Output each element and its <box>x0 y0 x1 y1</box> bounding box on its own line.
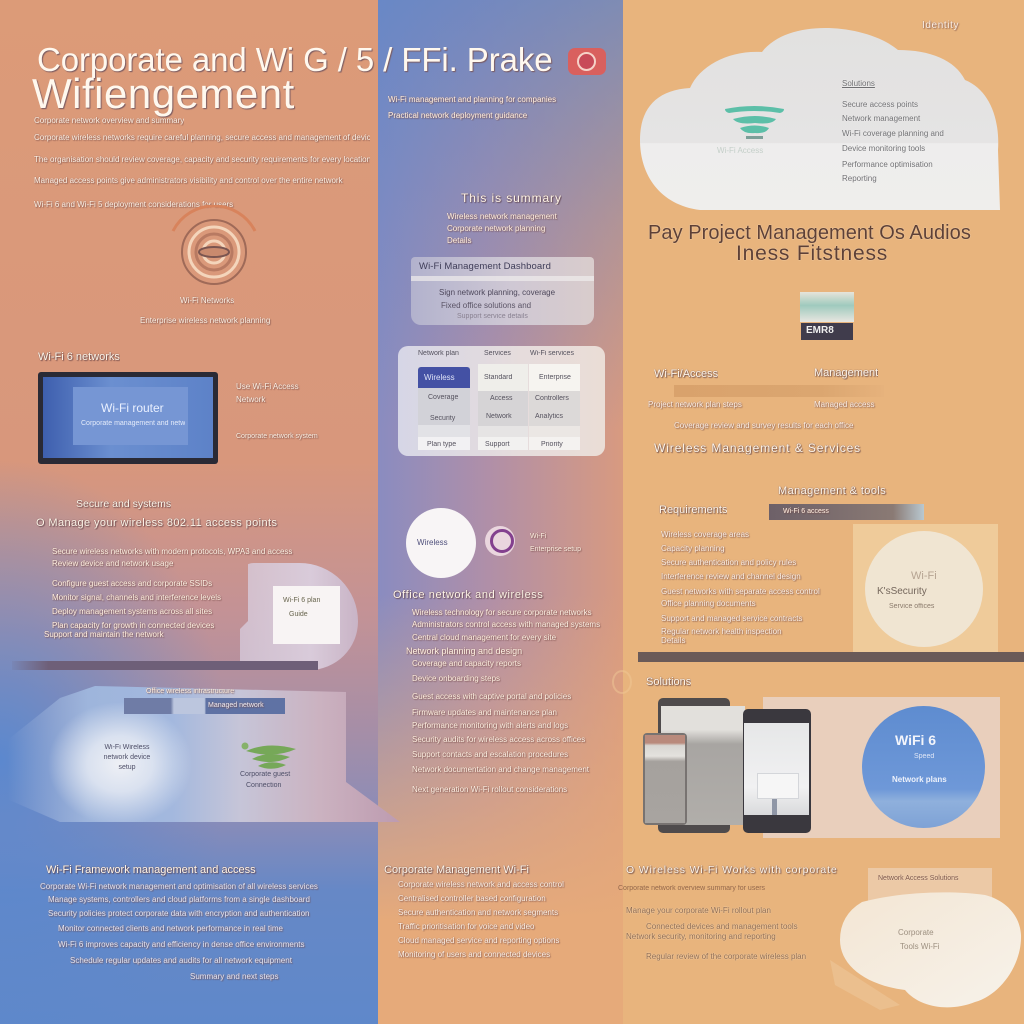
illustration: devices <box>643 698 811 833</box>
section: right list: Secure authentication and policy rules <box>661 558 796 567</box>
table column 1: Security <box>430 415 455 422</box>
text block: cloud list: Network management <box>842 114 920 123</box>
text: purple circle caption: Wi-Fi <box>530 533 546 540</box>
header strip <box>124 698 285 714</box>
text: teal wifi caption: Wi-Fi Access <box>717 146 763 155</box>
text block: bottom middle: Centralised controller based configuration <box>398 894 546 903</box>
circle: blue badge <box>862 706 985 828</box>
section: survey left: Plan capacity for growth in connected devices <box>52 621 214 630</box>
text block: bottom right: Manage your corporate Wi-Fi rollout plan <box>626 906 771 915</box>
icon: red badge <box>568 48 606 75</box>
header strip right <box>769 504 924 520</box>
text: top right tag: Identity <box>922 20 959 31</box>
text block: bottom left: Monitor connected clients and network performance in real time <box>58 924 283 933</box>
text: laptop notes <box>236 382 319 441</box>
text: laptop notes: Corporate network system <box>236 433 318 440</box>
heading: where: Wi-Fi 6 networks <box>38 351 120 363</box>
section: right columns: Managed access <box>814 400 874 409</box>
title: Wifiengement <box>32 70 295 117</box>
text block: bottom middle: Corporate wireless network and access control <box>398 880 564 889</box>
screen: Wi-Fi router <box>101 401 164 415</box>
text block: middle list: Security audits for wireless access across offices <box>412 735 585 744</box>
text block: intro middle: Wi-Fi management and planning for companies <box>388 95 556 104</box>
panel: left column <box>0 0 378 1024</box>
section: right list: Interference review and channel design <box>661 572 801 581</box>
tablet back <box>658 698 730 833</box>
circle: blue badge: Speed <box>914 753 934 760</box>
text block: bottom middle: Traffic prioritisation for voice and video <box>398 922 535 931</box>
text: bottom cloud <box>878 874 959 951</box>
text block: middle list: Guest access with captive portal and policies <box>412 692 571 701</box>
card: Guide <box>289 611 308 618</box>
text: wifi icon caption: Wi-Fi Networks <box>180 296 234 305</box>
icon: wifi rings left <box>172 205 256 285</box>
circle: blue badge: Network plans <box>892 775 947 784</box>
text block: middle list: Office network and wireless <box>393 589 544 601</box>
text block: bottom right: Regular review of the corporate wireless plan <box>646 952 806 961</box>
card: glass banner: Support service details <box>457 313 528 320</box>
text: purple circle caption <box>530 532 582 554</box>
heading: right column <box>648 222 971 265</box>
text block: middle list: Central cloud management for every site <box>412 633 556 642</box>
section: survey left: Monitor signal, channels and interference levels <box>52 593 221 602</box>
panel: office network: Connection <box>246 782 281 789</box>
panel: devices card <box>763 697 1000 838</box>
table column 2: Network <box>486 413 512 420</box>
table column 1: Plan type <box>427 441 456 448</box>
section: middle feature: Details <box>447 236 471 245</box>
text block: intro left <box>34 116 370 210</box>
cloud: bottom right <box>830 868 1021 1010</box>
text block: bottom left: Summary and next steps <box>190 972 278 981</box>
text block: middle list: Coverage and capacity reports <box>412 659 521 668</box>
heading: management: Management & tools <box>778 485 886 497</box>
icon: teal wifi <box>725 106 784 139</box>
section: middle feature <box>447 191 562 245</box>
screen <box>43 377 213 458</box>
text block: middle list: Performance monitoring with alerts and logs <box>412 721 568 730</box>
panel: middle column <box>378 0 623 1024</box>
card: comparison table: Wi-Fi services <box>530 350 574 357</box>
section: right columns: Coverage review and survey results for each office <box>674 421 854 430</box>
small tablet <box>643 733 687 825</box>
heading: right column: Pay Project Management Os Audios <box>648 222 971 244</box>
card <box>273 586 340 644</box>
laptop illustration <box>38 372 218 464</box>
text block: bottom middle: Cloud managed service and reporting options <box>398 936 559 945</box>
card: glass banner: Fixed office solutions and <box>441 301 531 310</box>
text block: bottom left: Corporate Wi-Fi network management and optimisation of all wireless services <box>40 882 318 891</box>
section: right list: Regular network health inspection <box>661 627 782 636</box>
section: right list: Requirements <box>659 504 727 516</box>
title: Corporate and Wi G / 5 / FFi. Prake <box>37 41 553 78</box>
text block: intro middle: Practical network deployment guidance <box>388 111 527 120</box>
text block: cloud list: Secure access points <box>842 100 918 109</box>
card: Wi-Fi 6 plan <box>283 597 320 604</box>
text block: intro left: Corporate network overview and summary <box>34 116 184 125</box>
header strip right: Wi-Fi 6 access <box>783 508 829 515</box>
section: right list: Capacity planning <box>661 544 725 553</box>
section: survey left <box>36 498 294 640</box>
text block: cloud list: Device monitoring tools <box>842 144 925 153</box>
text block: intro middle <box>388 95 558 121</box>
circle <box>865 531 983 647</box>
text block: cloud list: Performance optimisation <box>842 160 933 169</box>
text block: middle list: Network documentation and change management <box>412 765 589 774</box>
icon: white circle badge: Wireless <box>417 538 448 547</box>
cloud: top right <box>640 28 1000 210</box>
table column 3: Priority <box>541 441 563 448</box>
card: comparison table: Services <box>484 350 511 357</box>
text block: intro left: Corporate wireless networks require careful planning, secure access and management of devices <box>34 133 370 142</box>
section: right list <box>659 504 821 645</box>
panel: office network <box>0 686 400 822</box>
text block: bottom left: Wi-Fi 6 improves capacity and efficiency in dense office environments <box>58 940 304 949</box>
text block: bottom left: Manage systems, controllers and cloud platforms from a single dashboard <box>48 895 310 904</box>
text block: bottom left: Wi-Fi Framework management and access <box>46 864 256 876</box>
text block: bottom right: Connected devices and management tools <box>646 922 798 931</box>
table column 3 <box>529 364 580 450</box>
text block: bottom right: Corporate network overview summary for users <box>618 885 765 892</box>
text block: intro left: Managed access points give administrators visibility and control over the entire network <box>34 176 343 185</box>
text block: middle list: Support contacts and escalation procedures <box>412 750 568 759</box>
section: survey left: Secure wireless networks with modern protocols, WPA3 and access <box>52 547 292 556</box>
divider bar left <box>12 661 318 670</box>
section: right columns: Wi-Fi/Access <box>654 368 718 380</box>
panel: right column <box>623 0 1024 1024</box>
title <box>32 41 553 118</box>
icon: purple circle <box>485 526 515 556</box>
text block: middle list: Firmware updates and maintenance plan <box>412 708 557 717</box>
subheading: O Manage your wireless 802.11 access points <box>36 517 277 529</box>
text block: intro left: The organisation should review coverage, capacity and security requirements for every location <box>34 155 370 164</box>
text: purple circle caption: Enterprise setup <box>530 546 581 553</box>
section: right list: Wireless coverage areas <box>661 530 749 539</box>
bar <box>674 385 884 397</box>
label above strip: Office wireless infrastructure <box>146 688 234 695</box>
text block: middle list: Device onboarding steps <box>412 674 500 683</box>
table column 2: Access <box>490 395 513 402</box>
text block: middle list <box>393 589 602 795</box>
banner strip <box>411 276 594 281</box>
text: wifi icon caption <box>140 296 272 326</box>
text block: middle list: Administrators control access with managed systems <box>412 620 600 629</box>
text block: cloud list: Solutions <box>842 79 875 88</box>
text block: bottom right: Network security, monitoring and reporting <box>626 932 776 941</box>
text block: bottom right: O Wireless Wi-Fi Works with corporate <box>626 864 838 876</box>
heading: devices: Solutions <box>646 676 691 688</box>
text block: cloud list <box>842 79 944 183</box>
circle: blue badge: WiFi 6 <box>895 732 936 748</box>
text: laptop notes: Use Wi-Fi Access <box>236 382 299 391</box>
text: laptop notes: Network <box>236 395 265 404</box>
caption: Wi-Fi Wireless network device setup <box>104 744 150 771</box>
table column 3: Analytics <box>535 413 563 420</box>
text block: middle list: Wireless technology for secure corporate networks <box>412 608 592 617</box>
text block: middle list: Next generation Wi-Fi rollout considerations <box>412 785 567 794</box>
section: middle feature: Wireless network management <box>447 212 557 221</box>
text block: bottom middle <box>384 864 565 960</box>
text: bottom cloud: Tools Wi-Fi <box>900 942 940 951</box>
text block: bottom middle: Secure authentication and network segments <box>398 908 558 917</box>
section: right list: Office planning documents <box>661 599 756 608</box>
table header: Network plan <box>418 350 459 357</box>
text block: cloud list: Wi-Fi coverage planning and <box>842 129 944 138</box>
text block: intro left: Wi-Fi 6 and Wi-Fi 5 deployment considerations for users <box>34 200 233 209</box>
text block: bottom left: Schedule regular updates and audits for all network equipment <box>70 956 292 965</box>
section: right list: Details <box>661 636 685 645</box>
panel: circle card right <box>853 524 998 652</box>
text: bottom cloud: Corporate <box>898 928 934 937</box>
circle: Service offices <box>889 603 934 610</box>
table column 2 <box>478 364 528 450</box>
section: survey left: Review device and network usage <box>52 559 173 568</box>
text: bottom cloud: Network Access Solutions <box>878 875 959 882</box>
text block: bottom left: Security policies protect corporate data with encryption and authentication <box>48 909 309 918</box>
section: right list: Support and managed service contracts <box>661 614 802 623</box>
caption: Corporate guest <box>240 771 290 778</box>
section: right columns: Project network plan steps <box>648 400 742 409</box>
card: comparison table <box>398 346 605 456</box>
table column 1: Coverage <box>428 394 458 401</box>
section: middle feature: Corporate network planning <box>447 224 545 233</box>
banner text: Sign network planning, coverage <box>439 288 555 297</box>
text: wifi icon caption: Enterprise wireless network planning <box>140 316 270 325</box>
section: right columns <box>648 367 878 455</box>
table column 3: Enterprise <box>539 374 571 381</box>
text block: bottom left <box>40 864 319 982</box>
table column 1 <box>418 367 470 450</box>
table column 1: Wireless <box>424 373 455 382</box>
table column 2: Standard <box>484 374 512 381</box>
icon: white circle badge <box>406 508 476 578</box>
text block: cloud list: Reporting <box>842 174 877 183</box>
section: right columns: Wireless Management & Services <box>654 441 861 455</box>
section: right columns: Management <box>814 367 878 379</box>
heading: Secure and systems <box>76 498 171 510</box>
divider bar right <box>638 652 1024 662</box>
icon: device stack <box>800 292 854 340</box>
header strip: Managed network <box>208 702 264 709</box>
section: survey left: Support and maintain the network <box>44 630 164 639</box>
cloud with card <box>240 563 358 670</box>
section: survey left: Deploy management systems across all sites <box>52 607 212 616</box>
text block: middle list: Network planning and design <box>406 646 522 656</box>
text block: bottom middle: Corporate Management Wi-Fi <box>384 864 529 876</box>
section: right list: Guest networks with separate access control <box>661 587 820 596</box>
icon: green wifi <box>242 742 296 769</box>
heading: devices <box>612 670 691 694</box>
section: survey left: Configure guest access and corporate SSIDs <box>52 579 212 588</box>
table column 3: Controllers <box>535 395 569 402</box>
phone <box>743 709 811 833</box>
card: glass banner <box>411 257 594 325</box>
tablet screen <box>661 706 745 825</box>
text block: bottom middle: Monitoring of users and connected devices <box>398 950 550 959</box>
section: middle feature: This is summary <box>461 191 562 205</box>
table column 2: Support <box>485 441 510 448</box>
text block: bottom right <box>618 864 838 961</box>
